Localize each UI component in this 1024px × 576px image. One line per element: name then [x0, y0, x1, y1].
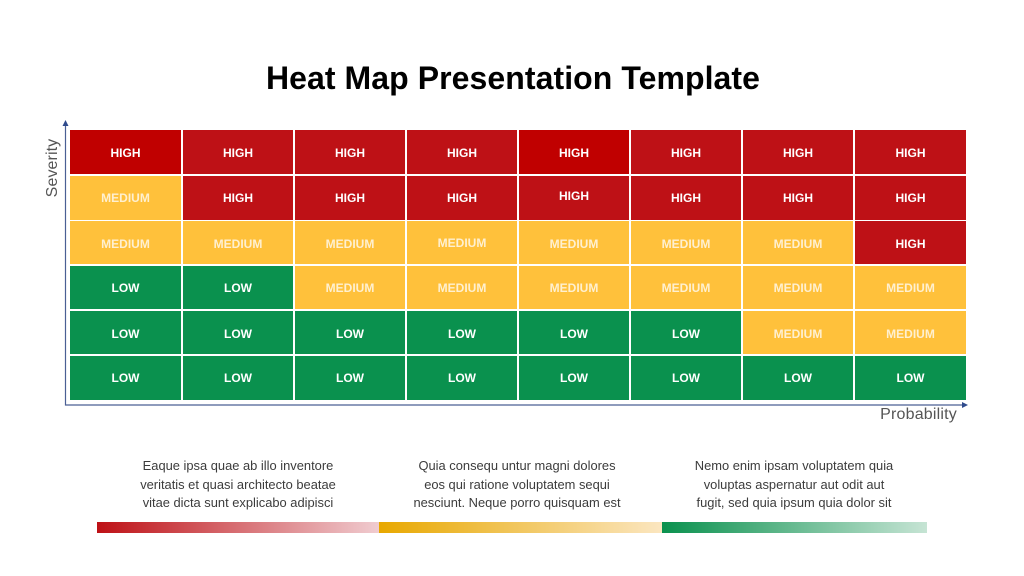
row 2: HIGH [447, 191, 477, 205]
row 6: LOW [784, 371, 812, 385]
row 3: MEDIUM [438, 236, 486, 250]
row 5 [70, 311, 966, 354]
row 4: MEDIUM [774, 280, 822, 294]
axis label: probability: Probability [880, 406, 957, 423]
text block: medium: Quia consequ untur magni dolores [418, 458, 616, 473]
row 3: MEDIUM [326, 237, 374, 251]
row 5: LOW [224, 327, 252, 341]
row 6: LOW [560, 371, 588, 385]
row 6: LOW [224, 371, 252, 385]
row 2: HIGH [671, 191, 701, 205]
row 1: HIGH [110, 146, 140, 160]
row 1: HIGH [671, 146, 701, 160]
row 2: HIGH [559, 188, 589, 202]
row 1: HIGH [223, 146, 253, 160]
title: Heat Map Presentation Template [266, 60, 760, 96]
row 2: HIGH [896, 191, 926, 205]
row 5: LOW [336, 327, 364, 341]
text block: high: Eaque ipsa quae ab illo inventore [143, 458, 333, 473]
row 4 [70, 266, 966, 309]
row 2: HIGH [335, 191, 365, 205]
text block: low: fugit, sed quia ipsum quia dolor sit [697, 495, 891, 510]
gradient bar: amber [379, 522, 662, 533]
row 5: LOW [112, 327, 140, 341]
row 2 [70, 176, 966, 220]
text block: medium [413, 458, 621, 510]
axis label: severity: Severity [44, 139, 61, 197]
text block: medium: nesciunt. Neque porro quisquam est [413, 495, 621, 510]
row 1 [70, 130, 966, 174]
row 6: LOW [448, 371, 476, 385]
row 5: LOW [560, 327, 588, 341]
gradient bar: green [662, 522, 927, 533]
row 4: MEDIUM [326, 280, 374, 294]
row 1: HIGH [783, 146, 813, 160]
row 4: LOW [112, 280, 140, 294]
row 1: HIGH [559, 146, 589, 160]
row 5: LOW [672, 327, 700, 341]
text block: low: Nemo enim ipsam voluptatem quia [695, 458, 893, 473]
text block: low [695, 458, 894, 510]
row 2: HIGH [223, 191, 253, 205]
row 2: MEDIUM [101, 191, 150, 205]
chart: heat map axes [62, 120, 968, 408]
row 1: HIGH [447, 146, 477, 160]
row 4: MEDIUM [662, 280, 710, 294]
row 4: MEDIUM [550, 280, 598, 294]
row 4: LOW [224, 280, 252, 294]
row 1: HIGH [896, 146, 926, 160]
row 4: MEDIUM [438, 280, 486, 294]
row 2: HIGH [783, 191, 813, 205]
row 1: HIGH [335, 146, 365, 160]
row 6: LOW [896, 371, 924, 385]
row 3: MEDIUM [774, 237, 822, 251]
text block: high: vitae dicta sunt explicabo adipisci [143, 495, 333, 510]
row 3: MEDIUM [550, 237, 598, 251]
row 6: LOW [672, 371, 700, 385]
row 6 [70, 356, 966, 400]
gradient bar: red [97, 522, 379, 533]
row 4: MEDIUM [886, 280, 935, 294]
row 3 [70, 221, 966, 264]
text block: low: voluptas aspernatur aut odit aut [704, 476, 884, 492]
heat map grid [70, 130, 966, 400]
text block: high [140, 458, 336, 510]
row 3: MEDIUM [662, 237, 710, 251]
text block: medium: eos qui ratione voluptatem sequi [424, 476, 610, 492]
row 3: MEDIUM [101, 237, 150, 251]
row 5: MEDIUM [886, 327, 935, 341]
row 6: LOW [112, 371, 140, 385]
row 3: MEDIUM [214, 237, 262, 251]
row 3: HIGH [896, 237, 926, 251]
row 5: MEDIUM [774, 327, 822, 341]
row 5: LOW [448, 327, 476, 341]
row 6: LOW [336, 371, 364, 385]
text block: high: veritatis et quasi architecto beatae [140, 476, 336, 492]
